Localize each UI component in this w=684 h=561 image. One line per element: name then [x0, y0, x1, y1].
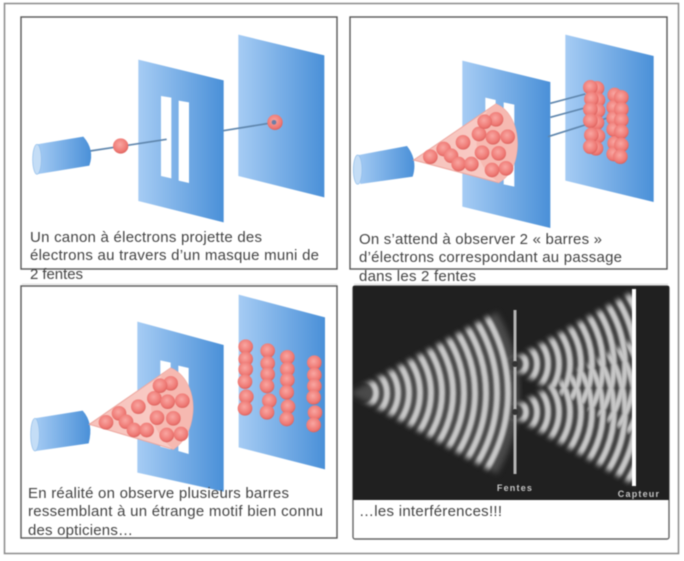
cannon — [353, 146, 414, 184]
electron trajectories — [548, 94, 614, 137]
panel 2 caption: d’électrons correspondant au passage — [359, 249, 622, 266]
panel: expected result — [350, 17, 668, 285]
panel 3 caption — [28, 485, 323, 539]
panel 1 caption — [22, 229, 337, 284]
panel 2 caption: dans les 2 fentes — [359, 268, 476, 285]
mask with two slits — [462, 61, 550, 228]
panel: electron gun — [21, 17, 337, 284]
slit barrier — [512, 310, 518, 474]
four bars of electrons — [238, 339, 322, 432]
panel 1 caption: Un canon à électrons projette des — [30, 229, 262, 246]
interference image background — [353, 286, 669, 500]
electron cone — [89, 368, 193, 449]
cannon — [33, 137, 91, 174]
panel 2 border — [350, 17, 667, 269]
electrons — [113, 115, 283, 154]
panel 3 diagram — [31, 295, 325, 492]
label: Fentes: Fentes — [497, 483, 533, 493]
two bars of electrons — [583, 80, 629, 164]
panel 2 caption — [354, 231, 668, 285]
electron trajectory — [90, 122, 275, 151]
electron cone — [414, 104, 517, 183]
panel 1 diagram — [33, 35, 324, 222]
impact point — [272, 120, 276, 125]
panel 1 border — [21, 17, 337, 269]
label: Capteur: Capteur — [618, 489, 660, 499]
wave from lower slit — [516, 338, 633, 486]
cannon — [31, 411, 90, 451]
mask with two slits — [138, 60, 224, 222]
electrons in cone — [99, 376, 190, 442]
panel 4 border — [353, 286, 669, 539]
wave from upper slit — [508, 290, 633, 436]
panel 3 caption: En réalité on observe plusieurs barres — [28, 485, 289, 502]
panel: observed result — [21, 286, 337, 539]
electrons in cone — [423, 112, 515, 177]
mask with two slits — [137, 322, 224, 492]
panel 3 caption: ressemblant à un étrange motif bien connu — [28, 503, 323, 520]
sensor line — [632, 289, 636, 486]
panel 1 caption: électrons au travers d’un masque muni de — [30, 247, 319, 264]
panel 3 border — [21, 286, 337, 538]
panel 1 caption: 2 fentes — [30, 266, 83, 283]
incoming wave — [353, 312, 522, 474]
screen — [239, 295, 325, 469]
panel 2 diagram — [353, 35, 654, 228]
screen — [238, 35, 324, 197]
panel 4 caption: …les interférences!!! — [359, 503, 502, 520]
panel 2 caption: On s’attend à observer 2 « barres » — [359, 231, 602, 248]
image margin right of sensor — [636, 286, 669, 500]
panel: interferences — [352, 284, 670, 540]
screen — [565, 35, 654, 202]
panel 3 caption: des opticiens… — [28, 522, 133, 539]
